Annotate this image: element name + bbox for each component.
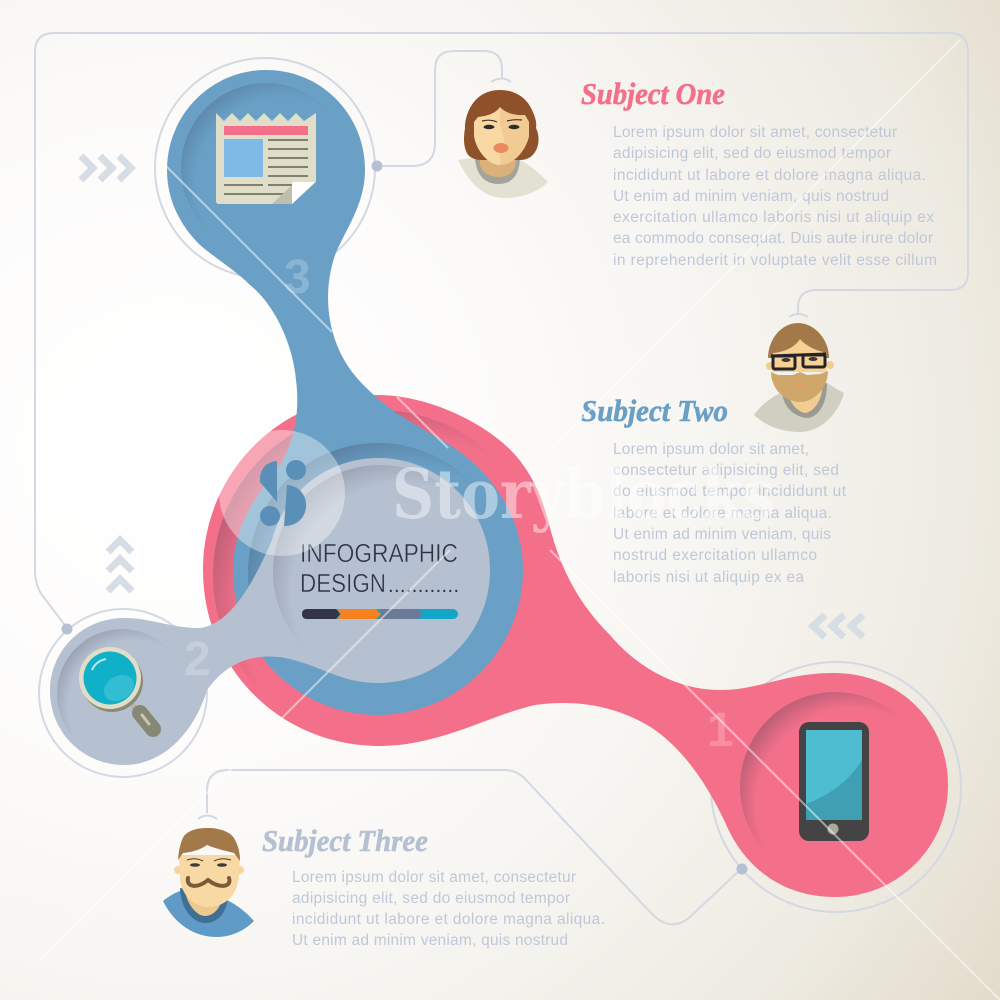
center title: INFOGRAPHIC — [300, 538, 458, 568]
icon: magnifier — [79, 647, 153, 729]
step numbers — [184, 251, 734, 757]
chevrons: left — [813, 615, 863, 637]
heading: subject two: Subject Two — [581, 393, 728, 428]
text block: subject three — [292, 869, 605, 949]
blue newspaper recess — [181, 83, 351, 253]
text block: subject one — [613, 124, 937, 269]
center title: DESIGN — [300, 568, 386, 598]
text block: subject two: do eiusmod tempor incididunt ut — [613, 483, 847, 500]
text block: subject three: adipisicing elit, sed do eiusmod tempor — [292, 890, 570, 907]
grey magnifier recess — [57, 629, 187, 759]
pink blob: step 1 — [203, 395, 948, 897]
grey center recess — [273, 465, 487, 679]
text block: subject two: laboris nisi ut aliquip ex ea — [613, 569, 804, 586]
text block: subject two: Ut enim ad minim veniam, quis — [613, 526, 831, 543]
text block: subject three: Ut enim ad minim veniam, quis nostrud — [292, 932, 568, 949]
avatar: bearded man with glasses — [754, 323, 844, 432]
text block: subject three: Lorem ipsum dolor sit amet, consectetur — [292, 869, 576, 886]
blue blob: step 3 — [167, 70, 523, 715]
text block: subject one: Lorem ipsum dolor sit amet, consectetur — [613, 124, 897, 141]
connector line: outer frame — [35, 33, 968, 628]
chevrons: right — [81, 156, 131, 180]
avatar: man with moustache — [163, 828, 254, 937]
text block: subject one: incididunt ut labore et dolore magna aliqua. — [613, 167, 926, 184]
connector line: subject one — [377, 51, 502, 166]
watermark wordmark: Storyblocks — [392, 455, 775, 535]
text block: subject two: consectetur adipisicing elit, sed — [613, 462, 839, 479]
pink phone recess — [740, 692, 930, 882]
icon: smartphone — [799, 722, 869, 841]
grey blob: step 2 — [50, 458, 490, 765]
text block: subject two: Lorem ipsum dolor sit amet, — [613, 441, 809, 458]
text block: subject one: adipisicing elit, sed do eiusmod tempor — [613, 145, 891, 162]
text block: subject one: exercitation ullamco laboris nisi ut aliquip ex — [613, 209, 934, 226]
step numbers: 1 — [707, 704, 734, 757]
text block: subject two: nostrud exercitation ullamco — [613, 547, 817, 564]
outer ring: top blob — [155, 58, 375, 278]
heading: subject three: Subject Three — [262, 823, 428, 858]
text block: subject one: Ut enim ad minim veniam, quis nostrud — [613, 188, 889, 205]
avatar: woman — [458, 90, 548, 198]
pink center recess — [213, 410, 543, 740]
chevrons: up — [108, 540, 132, 591]
connector caps — [198, 78, 808, 819]
connector dots — [62, 160, 748, 874]
text block: subject one: in reprehenderit in voluptate velit esse cillum — [613, 252, 937, 269]
step numbers: 3 — [284, 251, 311, 304]
text block: subject one: ea commodo consequat. Duis aute irure dolor — [613, 230, 933, 247]
watermark logo — [219, 430, 345, 556]
icon: newspaper — [216, 113, 316, 204]
connector line: subject three — [207, 770, 741, 924]
center title: ............ — [388, 575, 459, 597]
blue center recess — [248, 443, 508, 703]
center progress bar — [302, 609, 458, 619]
outer ring: left blob — [39, 609, 207, 777]
text block: subject three: incididunt ut labore et dolore magna aliqua. — [292, 911, 605, 928]
step numbers: 2 — [184, 633, 211, 686]
text block: subject two — [613, 441, 847, 586]
center title — [300, 538, 459, 598]
text block: subject two: labore et dolore magna aliqua. — [613, 505, 832, 522]
outer ring: right blob — [711, 662, 961, 912]
heading: subject one: Subject One — [581, 76, 725, 111]
